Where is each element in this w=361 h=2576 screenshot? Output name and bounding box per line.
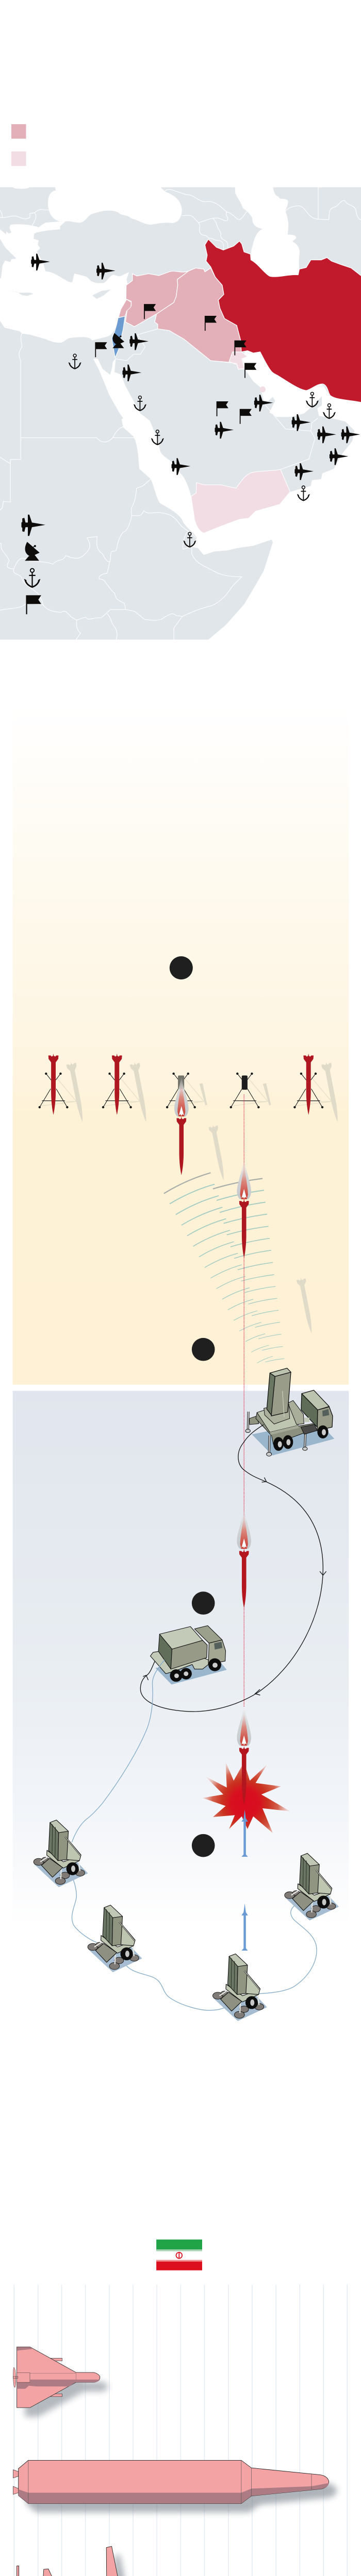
icon: anchor Egypt <box>69 354 81 369</box>
icon: jet base Turkey south <box>96 263 116 279</box>
path arrowheads <box>143 1478 326 1695</box>
icon: flag Saudi <box>217 401 228 416</box>
blast star <box>203 1762 290 1833</box>
sea: Black Sea <box>48 187 182 225</box>
icon: anchor key size <box>24 569 40 587</box>
radar beam arcs <box>164 1173 284 1363</box>
icon: jet base Saudi east <box>254 395 273 412</box>
icon: anchor Gulf <box>306 392 318 407</box>
icon: anchor Arabian Sea <box>297 486 309 500</box>
icons: base markers <box>22 253 360 614</box>
sea: Red Sea <box>93 359 204 538</box>
radar platform <box>257 1402 298 1432</box>
icon: jet base Oman <box>341 427 360 443</box>
icon: flag Saudi east <box>240 409 252 424</box>
icon: anchor Djibouti <box>184 532 196 547</box>
launcher frame 4 <box>230 1073 268 1108</box>
icon: flag Kuwait <box>244 363 256 378</box>
icon: anchor Red Sea centre <box>151 430 163 445</box>
interceptor in flight <box>241 1809 248 1857</box>
Bahrain marker <box>260 386 266 393</box>
icon: jet key size <box>22 515 45 536</box>
icon: jet base Red Sea <box>172 458 190 475</box>
fire control cable <box>103 1660 165 1803</box>
launcher frame 1 <box>39 1073 76 1108</box>
diagram: guidance and interception <box>103 1425 326 1833</box>
launcher cables <box>64 1803 317 2010</box>
control truck <box>151 1625 227 1685</box>
interceptor launcher 2 <box>88 1905 142 1972</box>
interceptor at launch <box>241 1904 248 1951</box>
map: Middle East bases <box>0 185 361 640</box>
country: Iraq <box>155 268 241 362</box>
tracking line: red dotted <box>243 1095 245 1707</box>
icon: radar key size <box>25 542 40 561</box>
icon: anchor Red Sea north <box>134 396 146 411</box>
interceptor launcher 4 <box>213 1954 267 2021</box>
launcher frame 2 <box>102 1073 140 1108</box>
icon: jet base Qatar <box>292 414 310 431</box>
descending missile 2 <box>237 1159 251 1258</box>
country: Kuwait <box>229 352 248 369</box>
icon: jet base Saudi north <box>123 365 141 381</box>
radar truck <box>245 1368 334 1456</box>
icon: flag Sinai <box>95 342 107 357</box>
weapon: drone <box>13 2347 108 2417</box>
radar antenna <box>267 1373 275 1415</box>
icon: flag key size <box>26 595 41 614</box>
land: Crete <box>10 291 34 296</box>
weapon: long range ballistic missile <box>13 2460 337 2512</box>
guidance path <box>140 1425 323 1711</box>
country: Israel <box>112 316 125 358</box>
icon: jet base Oman south <box>330 448 348 465</box>
descending missile 3 <box>237 1509 251 1608</box>
missile on pad 2 <box>112 1054 122 1115</box>
country: Lebanon <box>119 299 131 317</box>
step marker 2 <box>192 1338 215 1361</box>
missile on pad 1 <box>48 1054 58 1115</box>
truck cab <box>301 1394 318 1427</box>
descending missile 4 <box>237 1705 251 1805</box>
icon: jet base Jordan <box>129 333 149 350</box>
icon: flag Iraq <box>205 316 217 331</box>
country: Yemen <box>191 469 290 533</box>
flag: Iran <box>156 2240 202 2270</box>
land: Greece <box>0 239 17 278</box>
country: Syria <box>125 271 189 327</box>
diagram: launchers and interceptors <box>34 1803 339 2021</box>
missile shadows <box>66 1061 342 1334</box>
sea: Caspian <box>235 187 300 277</box>
panel: upper atmosphere <box>13 706 349 1385</box>
icon: jet base Turkey west <box>31 253 50 270</box>
step marker 1 <box>170 956 193 979</box>
sea: Persian Gulf and Arabian Sea <box>192 349 361 640</box>
icon: radar Israel <box>112 333 124 348</box>
weapons: Iranian arsenal <box>13 2347 337 2512</box>
icon: flag Syria <box>144 304 156 319</box>
icon: jet base Saudi centre <box>215 422 234 438</box>
weapon: cruise missile <box>13 2546 192 2576</box>
truck chassis <box>256 1413 316 1444</box>
icon: flag Basra <box>234 341 247 355</box>
pad 3 stub <box>178 1076 184 1089</box>
land: Cyprus <box>92 290 111 299</box>
panel: ground level <box>13 1391 349 1927</box>
icon: jet base Saudi south <box>294 463 314 480</box>
launcher frame 3 <box>166 1073 204 1108</box>
icon: jet base UAE <box>317 427 336 443</box>
legend swatch: proxy groups <box>11 151 26 166</box>
step marker 4 <box>192 1834 215 1857</box>
diagram: incoming missiles and launch stages <box>39 1054 342 1707</box>
truck wheels <box>273 1437 284 1451</box>
interceptor launcher 3 <box>285 1853 339 1921</box>
interceptor launcher 1 <box>34 1820 88 1887</box>
sea: Mediterranean and Aegean <box>0 222 129 343</box>
scale grid <box>14 2285 347 2576</box>
missile on pad 5 <box>303 1054 314 1115</box>
pad 4 stub <box>242 1076 248 1090</box>
country: Iran <box>205 239 361 402</box>
icon: anchor Gulf of Oman <box>323 404 335 418</box>
launcher frame 5 <box>293 1073 332 1108</box>
step marker 3 <box>192 1591 215 1615</box>
legend swatch: allied states <box>11 124 26 139</box>
launched missile 1 <box>174 1076 189 1175</box>
